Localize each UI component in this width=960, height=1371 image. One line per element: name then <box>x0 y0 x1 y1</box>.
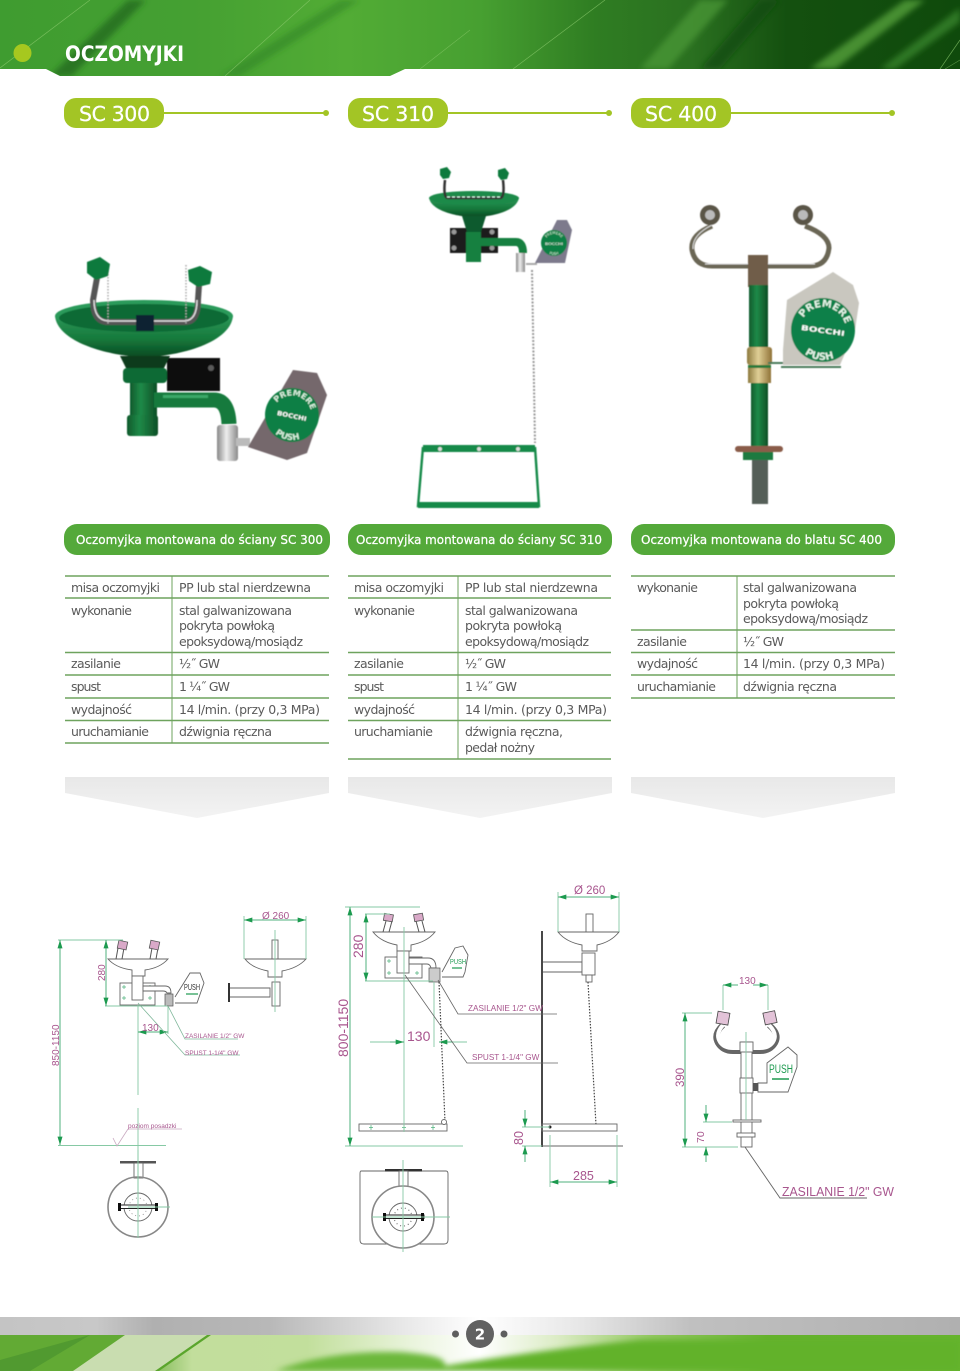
side view <box>228 930 306 1012</box>
photo: SC 310 eyewash with foot pedal <box>416 166 572 509</box>
photo: SC 310 eyewash with foot pedal: PUSH <box>548 250 560 256</box>
front view: PUSH <box>184 983 200 992</box>
dimensions: 280 <box>97 964 108 981</box>
model heading: SC 310 <box>348 98 612 128</box>
dimensions: 390 <box>675 1068 687 1087</box>
page number <box>452 1320 508 1348</box>
footer band <box>0 1317 960 1371</box>
arrow: SC 300 specs to drawing <box>65 777 329 818</box>
spec table: SC 300 <box>65 576 329 743</box>
spec table: SC 300: ½˝ GW <box>179 656 220 671</box>
technical drawing: SC 310 <box>335 885 623 1252</box>
spec table: SC 400: dźwignia ręczna <box>743 679 837 694</box>
spec table: SC 300: 1 ¼˝ GW <box>179 679 230 694</box>
product name bar: SC 300 <box>64 524 330 555</box>
spec table: SC 310: stal galwanizowana <box>465 603 578 618</box>
spec table: SC 300: zasilanie <box>71 656 121 671</box>
spec table: SC 300: epoksydową/mosiądz <box>179 634 303 649</box>
spec table: SC 300: stal galwanizowana <box>179 603 292 618</box>
spec table: SC 300: misa oczomyjki <box>71 580 160 595</box>
spec table: SC 310 <box>348 576 611 759</box>
spec table: SC 300: PP lub stal nierdzewna <box>179 580 311 595</box>
dimensions: SPUST 1-1/4" GW <box>472 1053 540 1062</box>
spec table: SC 310: wykonanie <box>354 603 415 618</box>
spec table: SC 310: misa oczomyjki <box>354 580 444 595</box>
spec table: SC 300: uruchamianie <box>71 724 149 739</box>
photo: SC 300 eyewash: PREMERE <box>272 388 317 410</box>
dimensions: 285 <box>573 1169 594 1183</box>
spec table: SC 400: stal galwanizowana <box>743 580 857 595</box>
header band <box>0 0 960 76</box>
photo: SC 310 eyewash with foot pedal: PREMERE <box>544 230 564 238</box>
dimensions: 130 <box>739 976 756 987</box>
dimensions: Ø 260 <box>262 911 290 922</box>
arrow: SC 310 specs to drawing <box>348 777 612 818</box>
dimensions <box>51 911 306 1190</box>
dimensions: 80 <box>512 1131 526 1145</box>
footer streaks <box>0 1335 756 1371</box>
front view <box>108 940 204 1006</box>
dimensions: 850-1150 <box>51 1024 62 1066</box>
front view: PUSH <box>769 1064 793 1076</box>
arrow: SC 400 specs to drawing <box>631 777 895 818</box>
header bullet <box>14 44 32 62</box>
dimensions <box>675 976 894 1199</box>
title: OCZOMYJKI <box>65 42 184 67</box>
product name bar: SC 300: Oczomyjka montowana do ściany SC 300 <box>76 532 323 547</box>
dimensions: 130 <box>142 1023 159 1034</box>
spec table: SC 400: wykonanie <box>637 580 698 595</box>
model heading: SC 300: SC 300 <box>79 102 150 126</box>
spec table: SC 300: 14 l/min. (przy 0,3 MPa) <box>179 702 320 717</box>
model heading: SC 400 <box>631 98 895 128</box>
spec table: SC 400: zasilanie <box>637 634 687 649</box>
dimensions: ZASILANIE 1/2" GW <box>185 1033 245 1040</box>
dimensions: 70 <box>695 1131 707 1143</box>
dimensions <box>335 885 619 1187</box>
spec table: SC 400: wydajność <box>637 656 698 671</box>
photo: SC 300 eyewash <box>54 256 328 462</box>
spec table: SC 300: wydajność <box>71 702 132 717</box>
dimensions: 130 <box>407 1028 431 1044</box>
front view: PUSH <box>450 959 466 966</box>
dimensions: ZASILANIE 1/2" GW <box>782 1185 894 1199</box>
spec table: SC 310: dźwignia ręczna, <box>465 724 563 739</box>
product name bar: SC 400 <box>631 524 895 555</box>
photo: SC 400 counter-mounted eyewash <box>688 204 860 505</box>
spec table: SC 310: wydajność <box>354 702 415 717</box>
spec table: SC 400: 14 l/min. (przy 0,3 MPa) <box>743 656 885 671</box>
photo: SC 400 counter-mounted eyewash: PUSH <box>804 347 834 361</box>
spec table: SC 400: epoksydową/mosiądz <box>743 611 868 626</box>
front view <box>716 1011 797 1147</box>
front view <box>359 913 468 1131</box>
spec table: SC 310: zasilanie <box>354 656 404 671</box>
spec table: SC 300: spust <box>71 679 101 694</box>
photo: SC 300 eyewash: PUSH <box>274 428 300 441</box>
technical drawing: SC 400 <box>675 976 894 1199</box>
spec table: SC 310: spust <box>354 679 384 694</box>
photo: SC 300 eyewash: BOCCHI <box>276 410 307 423</box>
spec table: SC 310: pokryta powłoką <box>465 618 562 633</box>
product name bar: SC 400: Oczomyjka montowana do blatu SC 400 <box>641 532 882 547</box>
spec table: SC 400: ½˝ GW <box>743 634 784 649</box>
model heading: SC 400: SC 400 <box>645 102 717 126</box>
spec table: SC 310: ½˝ GW <box>465 656 506 671</box>
spec table: SC 300: dźwignia ręczna <box>179 724 272 739</box>
side view <box>542 914 623 1147</box>
plan view <box>108 1150 170 1238</box>
dimensions: ZASILANIE 1/2" GW <box>468 1004 543 1013</box>
spec table: SC 310: pedał nożny <box>465 740 536 755</box>
spec table: SC 300: wykonanie <box>71 603 132 618</box>
spec table: SC 310: uruchamianie <box>354 724 433 739</box>
technical drawing: SC 300 <box>51 911 306 1238</box>
spec table: SC 400: pokryta powłoką <box>743 596 839 611</box>
spec table: SC 310: 14 l/min. (przy 0,3 MPa) <box>465 702 607 717</box>
decorative streaks <box>0 0 960 76</box>
spec table: SC 310: PP lub stal nierdzewna <box>465 580 598 595</box>
dimensions: poziom posadzki <box>128 1123 176 1130</box>
photo: SC 310 eyewash with foot pedal: BOCCHI <box>545 242 563 246</box>
dimensions: Ø 260 <box>574 885 605 897</box>
plan view <box>360 1160 450 1252</box>
product name bar: SC 310 <box>348 524 612 555</box>
spec table: SC 400: uruchamianie <box>637 679 716 694</box>
dimensions: 800-1150 <box>335 999 351 1057</box>
product name bar: SC 310: Oczomyjka montowana do ściany SC 310 <box>356 532 602 547</box>
spec table: SC 400 <box>631 576 895 698</box>
dimensions: 280 <box>350 934 366 958</box>
photo: SC 400 counter-mounted eyewash: BOCCHI <box>801 324 845 338</box>
spec table: SC 300: pokryta powłoką <box>179 618 275 633</box>
page number: 2 <box>475 1326 485 1344</box>
dimensions: SPUST 1-1/4" GW <box>185 1050 239 1057</box>
photo: SC 400 counter-mounted eyewash: PREMERE <box>798 298 852 324</box>
model heading: SC 310: SC 310 <box>362 102 434 126</box>
spec table: SC 310: epoksydową/mosiądz <box>465 634 589 649</box>
spec table: SC 310: 1 ¼˝ GW <box>465 679 517 694</box>
model heading: SC 300 <box>64 98 329 128</box>
